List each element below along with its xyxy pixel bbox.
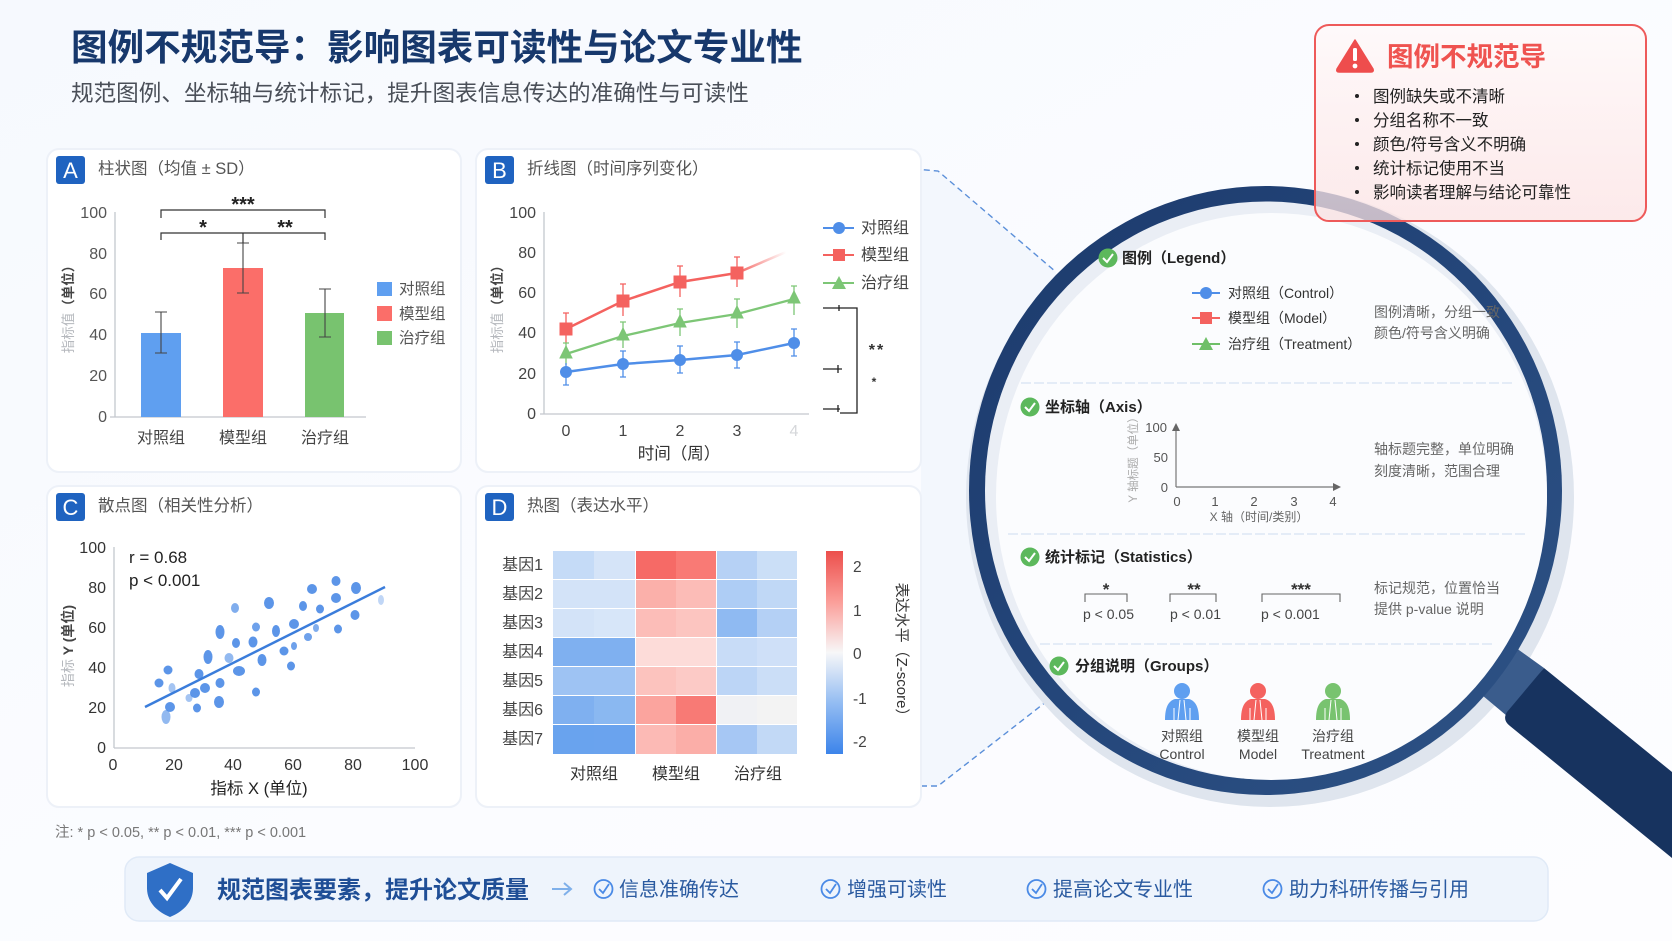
line chart axes: 1	[619, 423, 628, 440]
bar chart axes: 60	[89, 286, 107, 303]
statistics note: 标记规范，位置恰当	[1374, 580, 1500, 596]
scatter y axis title: 指标 Y (单位)	[60, 605, 76, 687]
axis note: 轴标题完整，单位明确	[1374, 441, 1514, 457]
mini axis diagram: 4	[1329, 494, 1337, 509]
heatmap row labels: 基因7	[502, 730, 543, 748]
scatter axes: 20	[88, 700, 106, 717]
heatmap row labels: 基因3	[502, 614, 543, 632]
heatmap color bar: -1	[853, 691, 867, 708]
footnote: 注: * p < 0.05, ** p < 0.01, *** p < 0.001	[55, 824, 306, 841]
statistics note	[1374, 580, 1500, 617]
heatmap row labels: 基因4	[502, 643, 543, 661]
heatmap column labels: 治疗组	[734, 765, 782, 783]
color bar title: 表达水平（Z-score）	[893, 583, 910, 723]
line chart legend	[823, 219, 909, 292]
warning heading: 图例不规范导	[1387, 42, 1546, 72]
warning bullet list: 图例缺失或不清晰	[1373, 87, 1505, 106]
significance samples: p < 0.001	[1261, 606, 1320, 622]
panel A heading: 柱状图（均值 ± SD）	[98, 159, 255, 178]
icon: check	[1050, 656, 1068, 676]
title: 图例不规范导：影响图表可读性与论文专业性	[71, 27, 803, 68]
line chart axes: 100	[509, 205, 536, 222]
bar chart axes: 40	[89, 327, 107, 344]
line chart significance bracket: *	[872, 375, 877, 389]
mini axis diagram: 100	[1145, 420, 1167, 435]
series: model group	[560, 252, 786, 343]
line chart legend: 模型组	[861, 246, 909, 264]
legend heading: 图例（Legend）	[1122, 250, 1235, 267]
bar chart axes: 20	[89, 368, 107, 385]
statistics heading: 统计标记（Statistics）	[1045, 548, 1202, 566]
badge A	[56, 156, 85, 184]
axis note	[1374, 441, 1514, 479]
scatter axes: 80	[88, 580, 106, 597]
scatter axes	[79, 540, 428, 798]
warning bullet list: 颜色/符号含义不明确	[1373, 135, 1526, 154]
benefit 2: 增强可读性	[847, 878, 947, 901]
heatmap row labels	[502, 556, 543, 748]
line chart legend: 对照组	[861, 219, 909, 237]
group labels: Treatment	[1301, 746, 1365, 762]
scatter axes: 40	[224, 757, 242, 774]
statistics note: 提供 p-value 说明	[1374, 601, 1484, 617]
bar chart axes	[80, 205, 366, 447]
significance samples: **	[1187, 580, 1201, 599]
magnifier lens ring	[969, 186, 1562, 795]
mini axis diagram: X 轴（时间/类别）	[1210, 509, 1308, 524]
legend samples: 模型组（Model）	[1228, 310, 1336, 326]
group labels: 模型组	[1237, 728, 1279, 744]
scatter statistics: r = 0.68	[129, 548, 187, 567]
panel C heading: 散点图（相关性分析）	[98, 496, 263, 515]
heatmap column labels	[570, 765, 782, 783]
line chart y axis title: 指标值（单位）	[489, 259, 505, 353]
benefit 1: 信息准确传达	[619, 878, 739, 901]
banner slogan: 规范图表要素，提升论文质量	[217, 876, 529, 904]
bar chart axes: 治疗组	[301, 429, 349, 447]
heatmap color bar: 0	[853, 646, 862, 663]
scatter axes: 0	[109, 757, 118, 774]
axis note: 刻度清晰，范围合理	[1374, 463, 1500, 479]
section: axis	[1020, 398, 1514, 524]
arrow	[552, 883, 571, 895]
bars	[141, 268, 344, 417]
panel B: line chart	[476, 149, 921, 472]
bar chart legend: 对照组	[399, 280, 446, 298]
scatter axes: 指标 X (单位)	[210, 779, 308, 798]
scatter axes: 80	[344, 757, 362, 774]
warning bullet list: 统计标记使用不当	[1373, 159, 1505, 178]
magnifier	[966, 186, 1672, 858]
legend note: 颜色/符号含义明确	[1374, 325, 1490, 341]
bar chart y axis title: 指标值（单位）	[60, 259, 76, 353]
group labels: Control	[1159, 746, 1205, 762]
mini axis diagram: 50	[1154, 450, 1168, 465]
line chart axes: 40	[518, 325, 536, 342]
group labels: Model	[1239, 746, 1277, 762]
badge C: C	[63, 495, 79, 520]
panel B heading: 折线图（时间序列变化）	[527, 159, 708, 178]
panel D: heatmap	[476, 486, 921, 807]
heatmap color bar	[826, 551, 867, 754]
heatmap color bar: 1	[853, 603, 862, 620]
mini axis diagram: 1	[1211, 494, 1219, 509]
line chart axes: 0	[562, 423, 571, 440]
mini axis diagram: 3	[1290, 494, 1298, 509]
bar chart legend: 治疗组	[399, 329, 446, 347]
significance brackets: **	[277, 217, 293, 239]
line chart axes: 80	[518, 245, 536, 262]
section: statistics	[1020, 548, 1500, 622]
magnifier lens shadow	[966, 187, 1574, 807]
heatmap cells	[553, 551, 797, 754]
section: groups	[1050, 656, 1365, 762]
groups heading: 分组说明（Groups）	[1075, 658, 1218, 675]
legend note	[1374, 304, 1500, 341]
heatmap row labels: 基因5	[502, 672, 543, 690]
significance brackets	[161, 194, 325, 243]
scatter axes: 20	[165, 757, 183, 774]
line chart axes: 20	[518, 366, 536, 383]
mini axis diagram: 2	[1250, 494, 1258, 509]
warning bullet list: 分组名称不一致	[1373, 111, 1488, 130]
benefit 3: 提高论文专业性	[1053, 878, 1193, 901]
significance samples: p < 0.01	[1170, 606, 1221, 622]
line chart axes: 0	[527, 406, 536, 423]
mini axis diagram: 0	[1161, 480, 1168, 495]
heatmap column labels: 对照组	[570, 765, 618, 783]
badge D: D	[492, 495, 507, 520]
scatter points	[154, 576, 384, 724]
heatmap row labels: 基因2	[502, 585, 543, 603]
panel A: bar chart	[47, 149, 461, 472]
scatter axes: 0	[97, 740, 106, 757]
axis heading: 坐标轴（Axis）	[1045, 399, 1152, 416]
scatter statistics	[129, 548, 200, 590]
heatmap column labels: 模型组	[652, 765, 700, 783]
series: treatment group	[560, 286, 800, 365]
icon: check	[1020, 398, 1040, 416]
line chart axes: 4	[790, 423, 799, 440]
series: control group	[560, 329, 800, 385]
mini axis diagram	[1126, 411, 1341, 524]
benefit 4: 助力科研传播与引用	[1289, 878, 1469, 901]
subtitle: 规范图例、坐标轴与统计标记，提升图表信息传达的准确性与可读性	[71, 81, 749, 106]
significance samples: ***	[1291, 580, 1311, 599]
zoom wedge with dashed connector lines	[864, 165, 1056, 786]
warning bullet list	[1355, 87, 1571, 202]
badge B	[485, 156, 514, 184]
line chart axes: 3	[733, 423, 742, 440]
group labels	[1159, 728, 1365, 762]
legend samples: 对照组（Control）	[1228, 285, 1343, 301]
badge A: A	[63, 158, 78, 183]
bar chart axes: 0	[98, 409, 107, 426]
significance samples: *	[1103, 580, 1110, 599]
significance samples	[1083, 580, 1340, 622]
icon: check	[1020, 548, 1040, 566]
panel D heading: 热图（表达水平）	[527, 496, 659, 515]
line chart axes	[509, 205, 809, 463]
scatter axes: 100	[79, 540, 106, 557]
line chart axes: 时间（周）	[638, 444, 720, 463]
mini axis diagram: 0	[1173, 494, 1181, 509]
significance brackets: ***	[231, 194, 255, 216]
badge D	[485, 493, 514, 521]
section: legend	[1098, 248, 1500, 352]
line chart significance bracket: **	[869, 342, 885, 359]
icon: warning triangle	[1337, 40, 1373, 72]
warning bullet list: 影响读者理解与结论可靠性	[1373, 183, 1571, 202]
bar chart axes: 模型组	[219, 429, 267, 447]
icon: control person	[1165, 683, 1199, 720]
scatter axes: 60	[88, 620, 106, 637]
line chart legend: 治疗组	[861, 274, 909, 292]
badge B: B	[492, 158, 507, 183]
line chart axes: 2	[676, 423, 685, 440]
significance brackets: *	[199, 217, 207, 239]
bottom banner	[125, 857, 1548, 921]
error bars	[155, 243, 331, 353]
bar chart axes: 80	[89, 246, 107, 263]
line chart significance bracket	[823, 305, 885, 413]
significance samples: p < 0.05	[1083, 606, 1134, 622]
magnifier handle	[1470, 640, 1672, 858]
scatter axes: 100	[402, 757, 428, 774]
warning callout	[1315, 25, 1646, 221]
bar chart axes: 100	[80, 205, 107, 222]
legend samples	[1192, 285, 1361, 352]
scatter statistics: p < 0.001	[129, 571, 200, 590]
group labels: 治疗组	[1312, 728, 1354, 744]
heatmap color bar: -2	[853, 734, 867, 751]
mini axis diagram: Y 轴标题（单位）	[1126, 411, 1140, 503]
bar chart legend: 模型组	[399, 305, 446, 323]
line chart axes: 60	[518, 285, 536, 302]
icon: model person	[1241, 683, 1275, 720]
regression line	[145, 587, 385, 707]
bar chart axes: 对照组	[137, 429, 185, 447]
scatter axes: 60	[284, 757, 302, 774]
group labels: 对照组	[1161, 728, 1203, 744]
icon: shield	[147, 863, 193, 917]
heatmap color bar: 2	[853, 559, 862, 576]
badge C	[56, 493, 85, 521]
icon: check	[1098, 248, 1118, 268]
panel C: scatter plot	[47, 486, 461, 807]
legend note: 图例清晰，分组一致	[1374, 304, 1500, 320]
scatter axes: 40	[88, 660, 106, 677]
icon: treatment person	[1316, 683, 1350, 720]
legend samples: 治疗组（Treatment）	[1228, 336, 1361, 352]
bar chart legend	[377, 280, 446, 347]
heatmap row labels: 基因1	[502, 556, 543, 574]
heatmap row labels: 基因6	[502, 701, 543, 719]
